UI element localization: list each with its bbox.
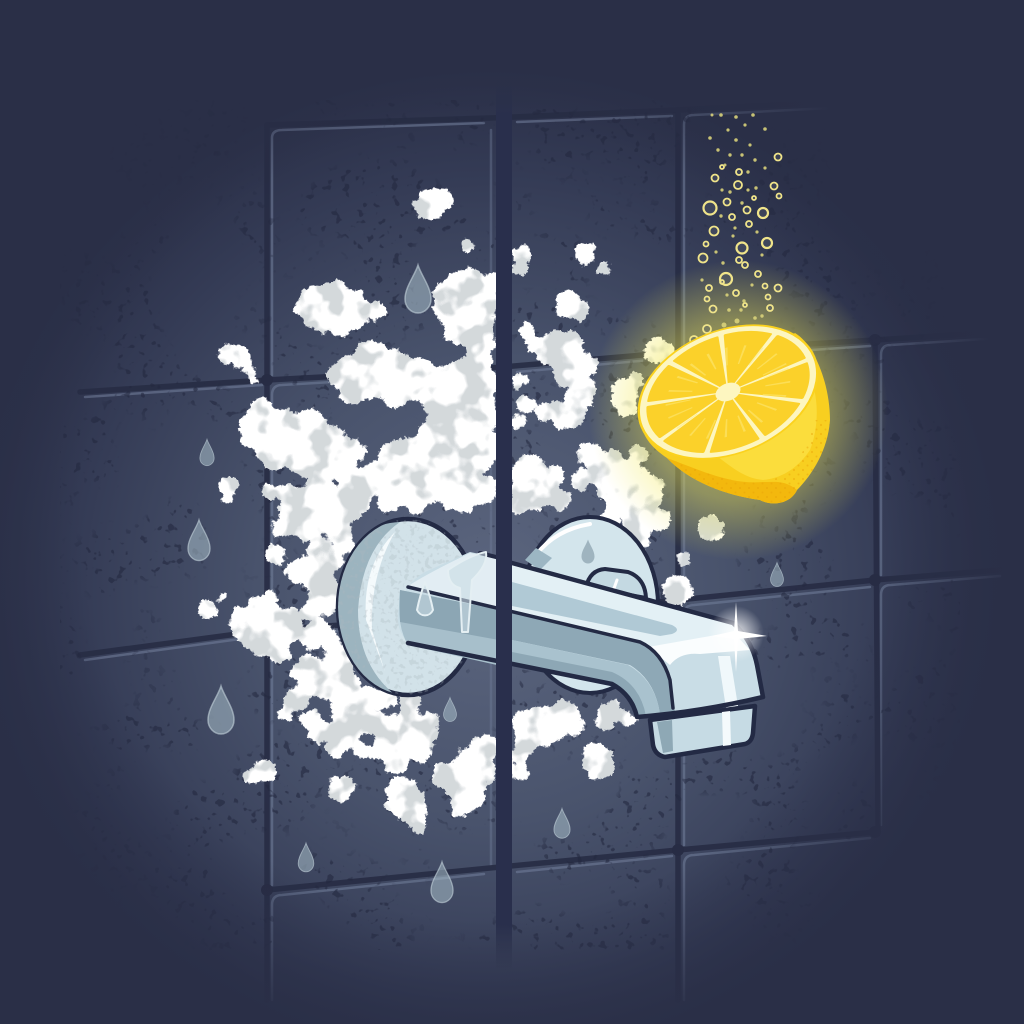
right wall flange <box>522 517 658 693</box>
water droplets on wall <box>188 265 783 903</box>
limescale deposits <box>200 190 721 833</box>
faucet <box>338 517 763 757</box>
spout body <box>398 552 763 717</box>
lemon cut face <box>619 300 837 484</box>
spout outlines <box>408 553 763 717</box>
sparkle on spout <box>708 602 767 672</box>
lemon glow <box>588 260 888 560</box>
lemon rind body <box>642 333 830 503</box>
lower dark band <box>512 612 675 714</box>
left wall flange <box>338 519 478 695</box>
spout nozzle <box>650 706 755 757</box>
rising citric bubbles <box>690 154 782 344</box>
drips on spout <box>417 552 486 632</box>
spout tip highlight <box>648 632 750 665</box>
scaled upper surface <box>408 553 500 608</box>
small bubble dots <box>700 113 767 336</box>
upper highlight band <box>512 563 742 650</box>
grime speckles on tiles <box>60 100 960 950</box>
lemon segments <box>630 310 826 474</box>
lemon half <box>619 300 837 503</box>
vertical glass divider <box>496 70 512 970</box>
tile grid <box>80 100 1000 1000</box>
spout left shadow band <box>399 590 510 668</box>
